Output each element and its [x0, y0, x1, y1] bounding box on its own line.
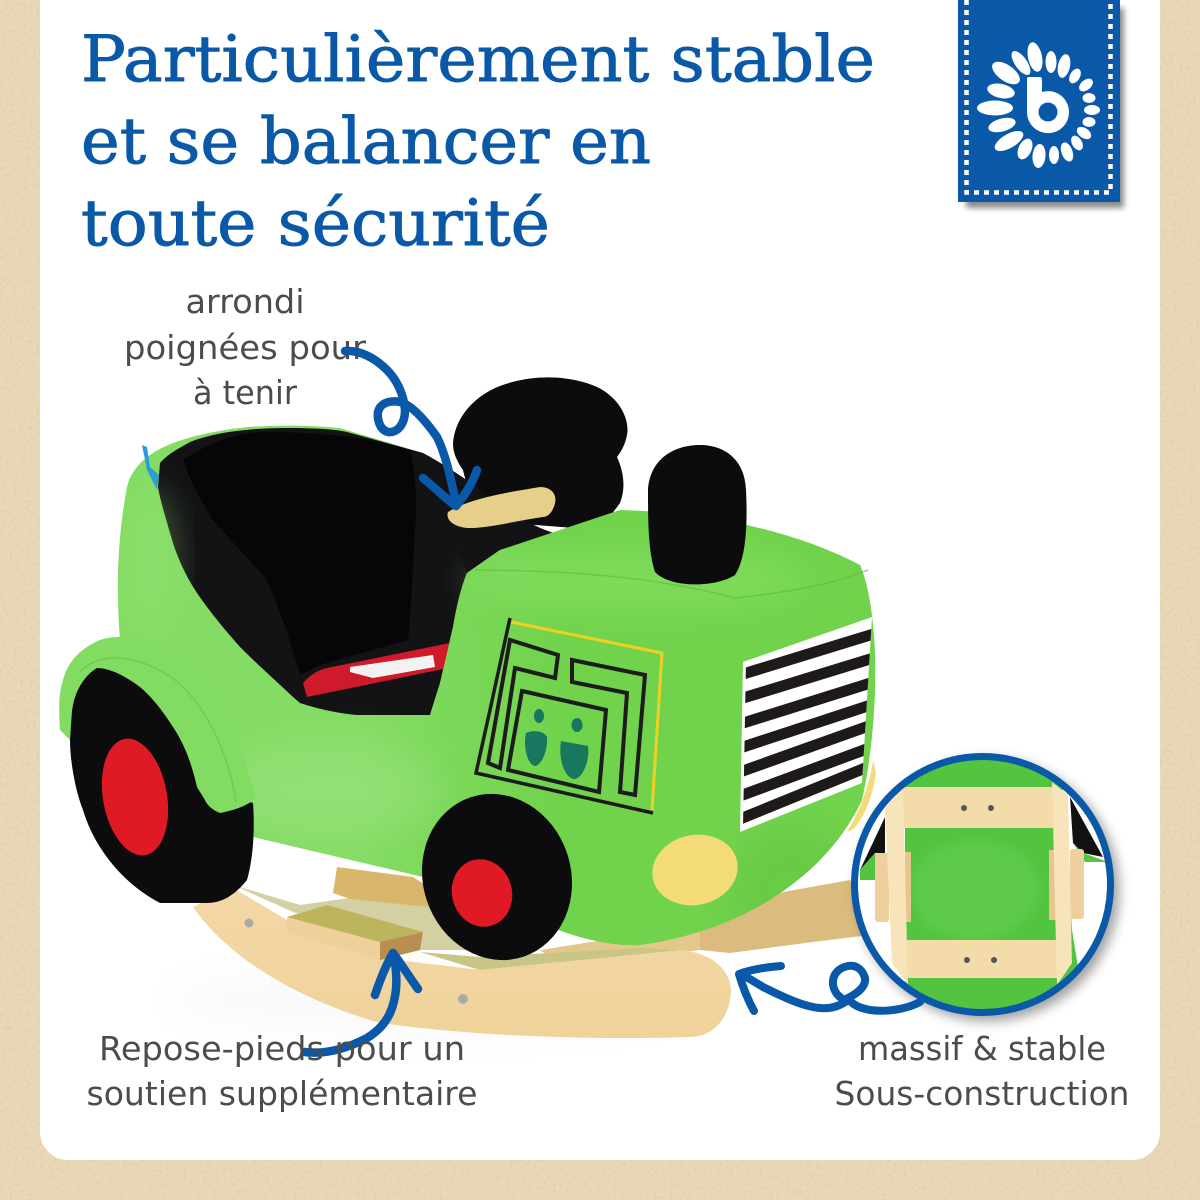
ground shadow	[170, 965, 690, 1035]
icon: letter b	[1027, 77, 1069, 133]
body	[118, 426, 640, 945]
label: handles	[124, 282, 366, 412]
label: under-construction	[834, 1029, 1130, 1113]
logo: blue tag with flower	[958, 0, 1124, 208]
soft fabric highlights	[125, 490, 850, 950]
illustration: rocking tractor	[59, 377, 880, 1038]
label: footrest	[86, 1029, 477, 1113]
rear wheel	[70, 660, 254, 903]
front wheel	[401, 774, 593, 980]
title	[81, 23, 875, 261]
label: footrest: Repose-pieds pour un	[99, 1029, 465, 1068]
icon: petals	[977, 41, 1100, 169]
label: under-construction: Sous-construction	[834, 1074, 1130, 1113]
arrow: footrest	[305, 953, 418, 1053]
grille	[740, 617, 880, 832]
title: toute sécurité	[81, 187, 550, 261]
tractor steering wheel	[453, 377, 628, 530]
arrow: under-construction	[739, 966, 920, 1011]
rockers and wood	[193, 867, 870, 1038]
blue tag	[142, 445, 159, 490]
exhaust	[648, 445, 747, 584]
hood	[421, 510, 875, 945]
arrow: handle	[345, 351, 477, 506]
handle	[447, 487, 555, 528]
label: handles: poignées pour	[124, 328, 366, 367]
title: Particulièrement stable	[81, 23, 875, 97]
label: under-construction: massif & stable	[858, 1029, 1106, 1068]
label: handles: à tenir	[193, 373, 297, 412]
seat	[158, 428, 560, 715]
headlight	[646, 827, 744, 913]
hood seam	[475, 570, 868, 598]
title: et se balancer en	[81, 105, 651, 179]
label: footrest: soutien supplémentaire	[86, 1074, 477, 1113]
inset: circular close-up of under-construction	[854, 750, 1119, 1021]
seat belt	[303, 643, 450, 697]
footrest	[287, 905, 423, 960]
rear mudguard	[59, 637, 256, 813]
label: handles: arrondi	[186, 282, 304, 321]
embroidered panel	[476, 618, 662, 813]
